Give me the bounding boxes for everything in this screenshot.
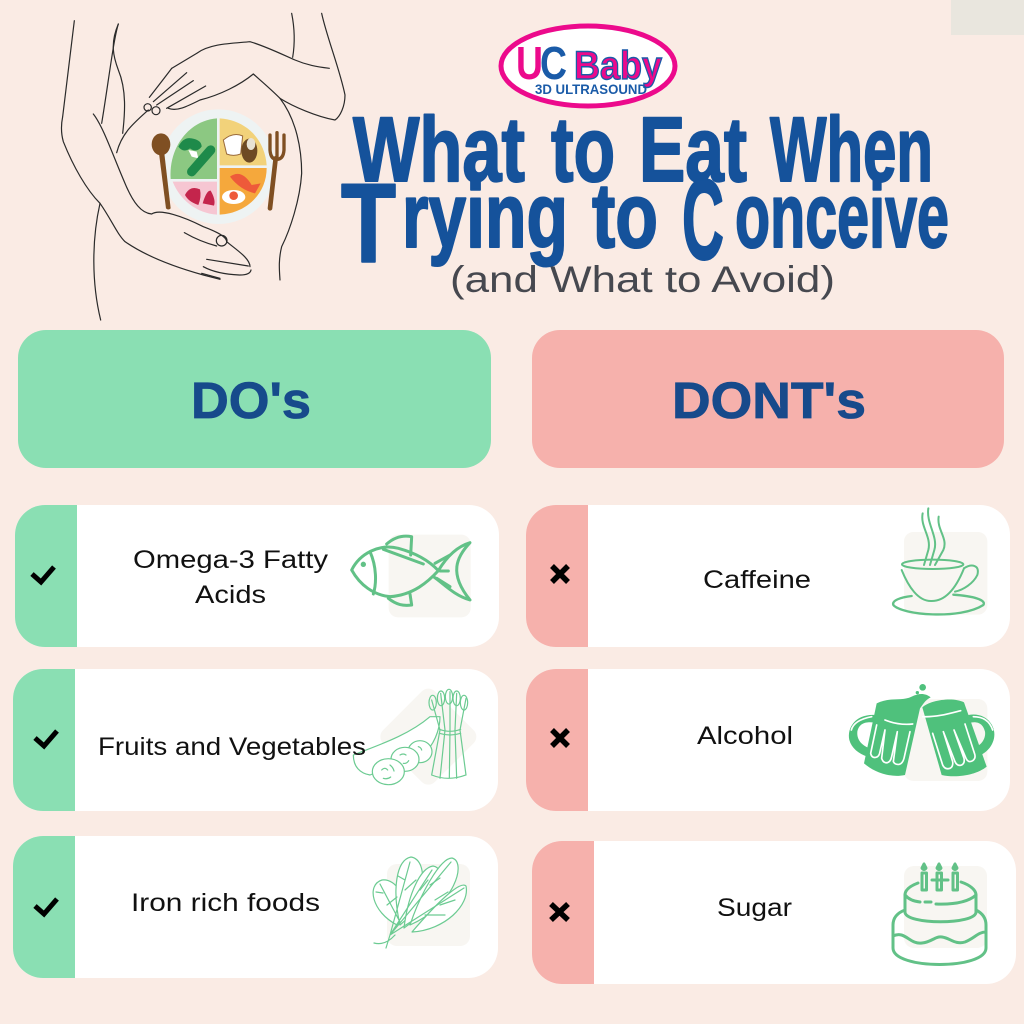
logo: UC Baby 3D Ultrasound: U (516, 37, 543, 89)
spoon (152, 133, 171, 209)
fork (270, 133, 284, 208)
row: Fruits and Vegetables (13, 669, 498, 811)
row: Caffeine: Caffeine (703, 566, 811, 594)
row: Iron rich foods: Iron rich foods (131, 889, 320, 917)
illustration: pregnant belly with hands and food plate (61, 13, 345, 320)
row: Fruits and Vegetables: Fruits and Vegetables (98, 733, 366, 761)
icon: check (32, 567, 54, 582)
icon: check (35, 731, 57, 746)
title: T (341, 161, 396, 286)
row: Omega-3 Fatty Acids: Omega-3 Fatty (133, 546, 329, 574)
logo: UC Baby 3D Ultrasound: Baby (574, 44, 663, 88)
title (341, 99, 949, 286)
row: Caffeine (526, 505, 1010, 647)
icon: cross (552, 730, 568, 746)
icon: spinach (373, 857, 470, 948)
title: to (592, 165, 658, 267)
subtitle: (and What to Avoid) (450, 259, 835, 300)
title: to (551, 99, 615, 201)
title: rying (402, 165, 568, 267)
row: Omega-3 Fatty Acids (15, 505, 499, 647)
icon: check (35, 899, 57, 914)
row: Iron rich foods (13, 836, 498, 978)
title: C (682, 157, 724, 284)
title: Eat (639, 99, 747, 201)
logo: UC Baby 3D Ultrasound: C (540, 37, 567, 89)
row: Alcohol (526, 669, 1010, 811)
icon: coffee cup (893, 508, 987, 615)
panel: DO's header: DO's (191, 372, 311, 429)
logo: UC Baby 3D Ultrasound: 3D ULTRASOUND (535, 81, 647, 97)
icon: beer mugs (849, 684, 994, 781)
title: What (353, 99, 525, 201)
panel: DO's header (18, 330, 491, 468)
body line art (61, 13, 345, 320)
logo: UC Baby 3D Ultrasound (501, 26, 675, 106)
row: Omega-3 Fatty Acids: Acids (195, 581, 266, 609)
icon: cucumber and asparagus (353, 685, 480, 789)
icon: cross (551, 904, 568, 920)
row: Sugar: Sugar (717, 894, 792, 922)
icon: cross (552, 566, 568, 582)
title: When (770, 99, 933, 201)
row: Sugar (532, 841, 1016, 984)
panel: DONT's header: DONT's (672, 372, 866, 429)
icon: fish (352, 535, 471, 617)
row: Alcohol: Alcohol (697, 722, 793, 750)
icon: birthday cake (893, 864, 987, 964)
food plate (161, 109, 276, 224)
panel: DONT's header (532, 330, 1004, 468)
